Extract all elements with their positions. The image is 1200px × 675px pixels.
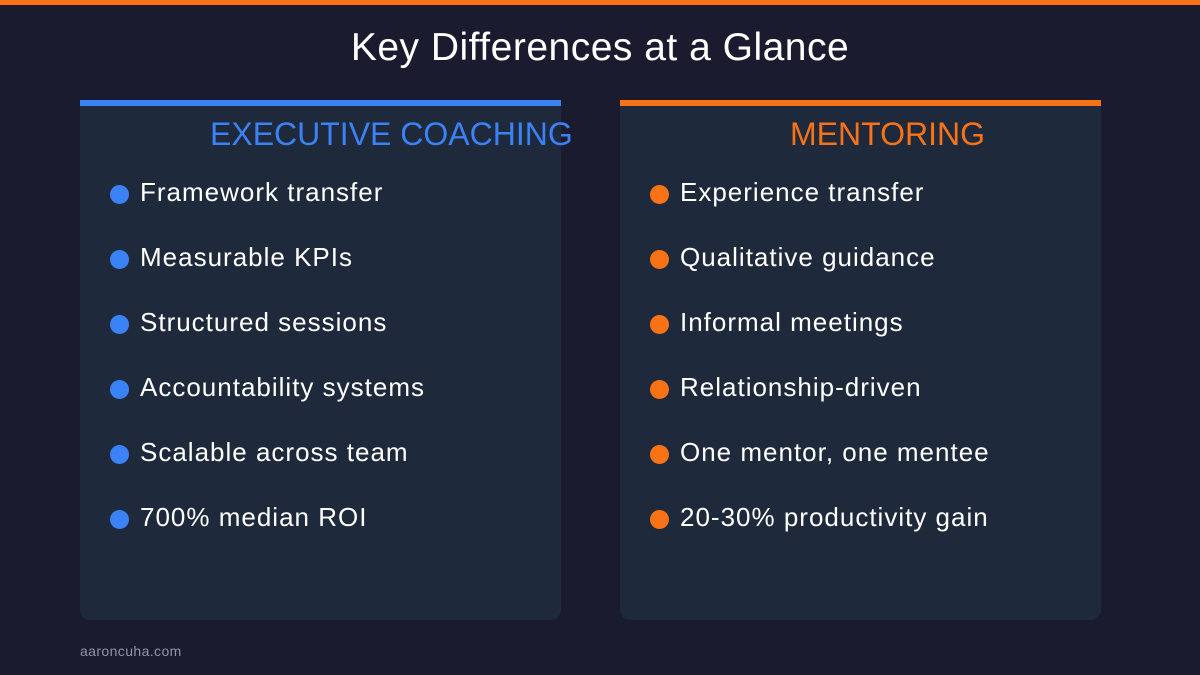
item: [110, 437, 409, 467]
list: executive coaching: Structured sessions: [140, 307, 387, 337]
heading: executive coaching: EXECUTIVE COACHING: [210, 116, 573, 152]
item: [650, 437, 990, 467]
list: executive coaching: [110, 177, 425, 532]
list: executive coaching: Scalable across team: [140, 437, 409, 467]
list: mentoring: Experience transfer: [680, 177, 924, 207]
top accent bar: [0, 0, 1200, 5]
list: mentoring: 20-30% productivity gain: [680, 502, 989, 532]
list: mentoring: Informal meetings: [680, 307, 904, 337]
item: [110, 307, 387, 337]
item: [110, 372, 425, 402]
heading: mentoring: MENTORING: [790, 116, 985, 152]
panel: mentoring: [620, 100, 1101, 620]
item: [110, 242, 353, 272]
item: [650, 502, 989, 532]
list: executive coaching: Measurable KPIs: [140, 242, 353, 272]
list: mentoring: Relationship-driven: [680, 372, 922, 402]
item: [650, 372, 922, 402]
footer: aaroncuha.com: [80, 643, 182, 659]
item: [650, 307, 904, 337]
item: [650, 177, 924, 207]
list: executive coaching: 700% median ROI: [140, 502, 367, 532]
list: mentoring: [650, 177, 990, 532]
item: [650, 242, 936, 272]
item: [110, 177, 383, 207]
list: executive coaching: Accountability systems: [140, 372, 425, 402]
item: [110, 502, 367, 532]
list: executive coaching: Framework transfer: [140, 177, 383, 207]
panel: executive coaching: [80, 100, 561, 620]
title: Key Differences at a Glance: [351, 26, 849, 69]
list: mentoring: Qualitative guidance: [680, 242, 936, 272]
list: mentoring: One mentor, one mentee: [680, 437, 990, 467]
